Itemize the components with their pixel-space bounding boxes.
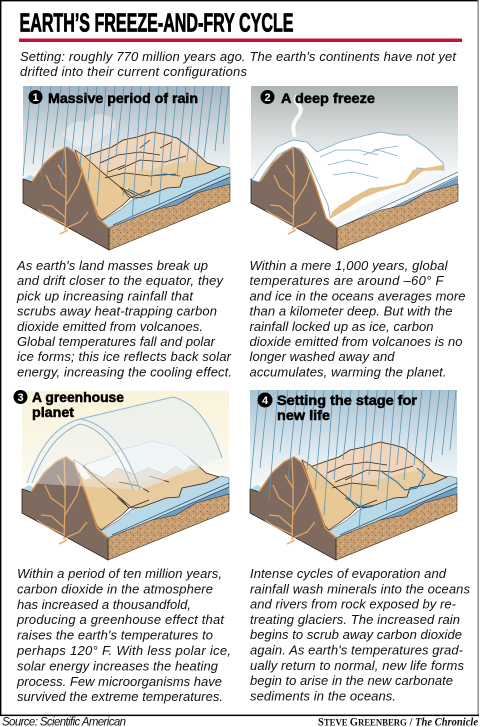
caption 3: raises the earth's temperatures to: [17, 628, 213, 643]
caption 1: [16, 258, 232, 379]
landscape block: [251, 132, 458, 250]
greenhouse dome: [27, 397, 222, 490]
caption 3: has increased a thousandfold,: [17, 597, 191, 612]
frame right edge: [478, 0, 479, 716]
caption 4: sediments in the oceans.: [250, 688, 396, 703]
heading: Massive period of rain: [48, 90, 198, 106]
panel 1: massive period of rain: [23, 86, 230, 250]
rain: [23, 86, 229, 221]
caption 2: and ice in the oceans averages more: [250, 288, 466, 303]
caption 4: rainfall wash minerals into the oceans: [250, 581, 470, 596]
landscape block: [250, 442, 457, 560]
caption 1: and drift closer to the equator, they: [17, 273, 224, 288]
caption 3: carbon dioxide in the atmosphere: [17, 581, 213, 596]
caption 4: Intense cycles of evaporation and: [250, 566, 447, 581]
caption 4: begin to arise in the new carbonate: [250, 673, 453, 688]
caption 3: producing a greenhouse effect that: [16, 612, 225, 627]
caption 1: scrubs away heat-trapping carbon: [17, 304, 217, 319]
heading: new life: [277, 407, 330, 423]
panel 4: setting the stage for new life: [250, 390, 457, 560]
heading: A deep freeze: [281, 90, 375, 106]
caption 1: energy, increasing the cooling effect.: [17, 364, 232, 379]
volcano steam: [293, 96, 301, 137]
caption 4: again. As earth's temperatures grad-: [250, 642, 464, 658]
caption 1: pick up increasing rainfall that: [16, 288, 194, 303]
caption 3: [16, 566, 231, 704]
caption 3: survived the extreme temperatures.: [17, 689, 223, 704]
caption 4: begins to scrub away carbon dioxide: [250, 627, 462, 642]
heading: planet: [32, 404, 74, 420]
caption 2: than a kilometer deep. But with the: [250, 304, 452, 319]
caption 1: ice forms; this ice reflects back solar: [17, 349, 232, 364]
caption 3: process. Few microorganisms have: [16, 674, 222, 689]
landscape block: [23, 132, 230, 250]
caption 2: [250, 258, 466, 379]
caption 2: accumulates, warming the planet.: [250, 364, 446, 379]
caption 1: dioxide emitted from volcanoes.: [17, 319, 203, 334]
caption 2: Within a mere 1,000 years, global: [250, 258, 449, 273]
caption 1: Global temperatures fall and polar: [17, 334, 216, 349]
caption 4: ually return to normal, new life forms: [250, 658, 464, 673]
caption 2: temperatures are around –60° F: [250, 273, 445, 288]
sky: [22, 391, 229, 496]
heading: [258, 392, 418, 423]
caption 3: solar energy increases the heating: [17, 658, 219, 673]
heading: A greenhouse: [32, 389, 124, 405]
frame bottom edge: [0, 715, 479, 716]
intro text: drifted into their current configurations: [20, 64, 248, 79]
sky with clouds: [23, 86, 230, 186]
heading: 2: [264, 92, 271, 104]
panel 3: a greenhouse planet: [14, 389, 229, 560]
caption 4: and rivers from rock exposed by re-: [250, 597, 457, 612]
caption 2: dioxide emitted from volcanoes is no: [250, 334, 462, 349]
caption 3: Within a period of ten million years,: [17, 566, 222, 581]
heading: 4: [262, 395, 269, 407]
heading: 1: [32, 92, 39, 104]
landscape block: [22, 441, 229, 560]
sky: [250, 390, 457, 495]
heading: Setting the stage for: [277, 392, 418, 408]
panel 2: a deep freeze: [251, 86, 458, 250]
caption 4: [250, 566, 470, 703]
intro text: [20, 49, 457, 79]
caption 2: rainfall locked up as ice, carbon: [250, 319, 434, 334]
heading: [14, 389, 124, 420]
heading: 3: [17, 392, 24, 404]
caption 2: longer washed away and: [250, 349, 395, 364]
title rule: [19, 38, 462, 42]
caption 4: treating glaciers. The increased rain: [250, 612, 460, 627]
caption 3: perhaps 120° F. With less polar ice,: [16, 643, 231, 658]
caption 1: As earth's land masses break up: [16, 258, 208, 273]
intro text: Setting: roughly 770 million years ago. The earth's continents have not yet: [20, 49, 457, 64]
title: EARTH’S FREEZE-AND-FRY CYCLE: [20, 8, 294, 38]
sky: [251, 86, 458, 186]
rain: [250, 390, 456, 530]
